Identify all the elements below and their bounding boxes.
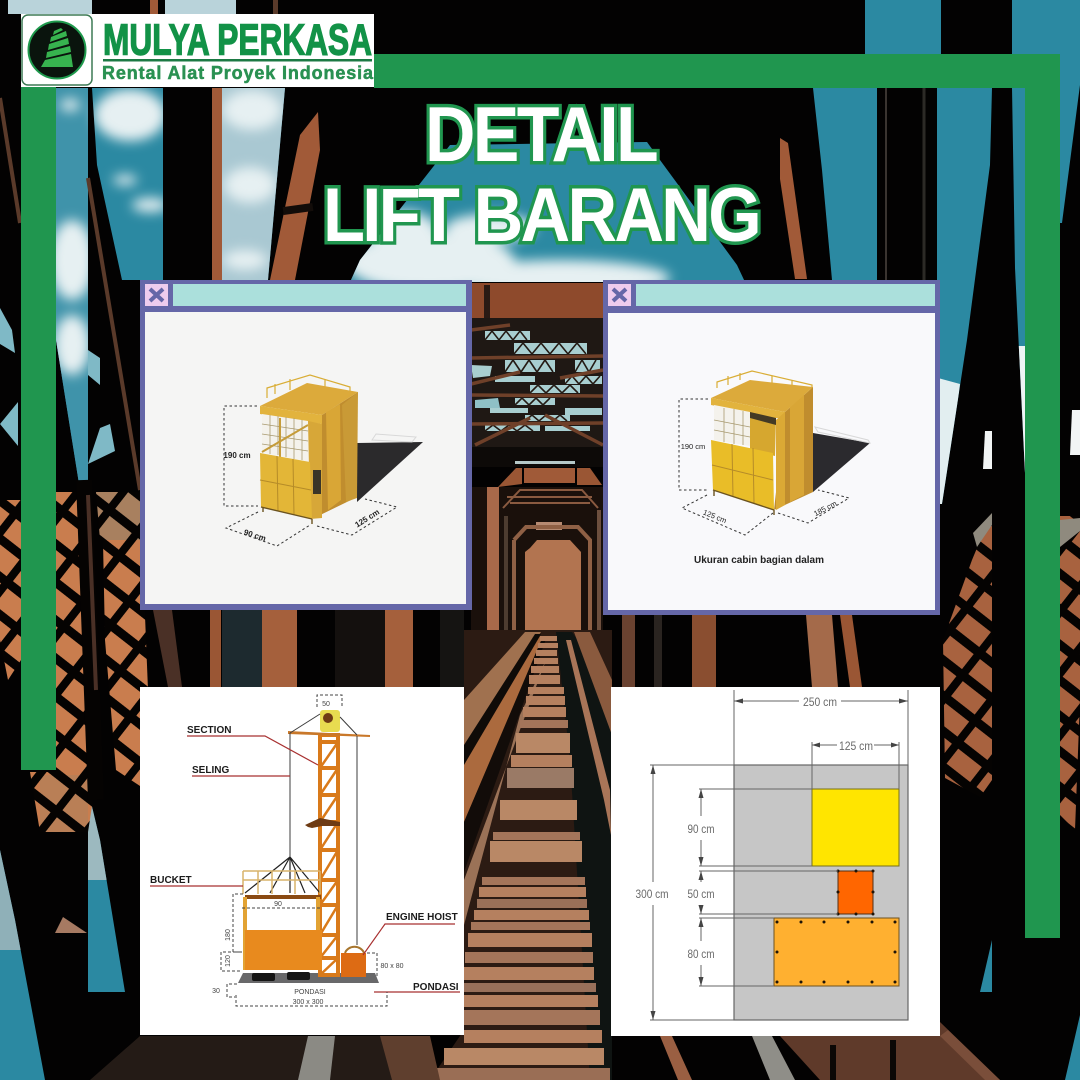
dimension values: 50 (322, 701, 330, 708)
truss sky panes (471, 331, 602, 431)
trolley arm (305, 818, 340, 828)
dimension labels: 125 cm (702, 508, 728, 525)
tagline: Rental Alat Proyek Indonesia (102, 63, 374, 83)
cables (245, 714, 357, 945)
dimension values: 120 (225, 955, 232, 967)
title: Detail Lift Barang: DETAIL (425, 90, 657, 178)
dimension labels (681, 442, 838, 525)
title: Detail Lift Barang (323, 90, 759, 258)
panel: cabin inner dimensions window (603, 280, 940, 615)
logo: Mulya Perkasa (21, 14, 374, 87)
bucket cage (243, 871, 322, 981)
dimension lines (224, 406, 397, 546)
green L-shaped frame (21, 54, 1060, 938)
engine hoist box (341, 947, 366, 977)
rust columns in the upper band (150, 0, 807, 280)
dimension values: 30 (212, 988, 220, 995)
dimension labels (223, 451, 381, 543)
rust lattice on the left tower (0, 492, 148, 933)
icon: close box (608, 284, 631, 306)
caption: Ukuran cabin bagian dalam (694, 555, 824, 566)
dimension lines (650, 690, 908, 1020)
callout labels: SECTION (187, 725, 231, 736)
callout lines (150, 736, 460, 992)
dimension labels: 190 cm (223, 451, 251, 460)
concrete slab (734, 765, 908, 1020)
dimension lines (679, 399, 849, 535)
company name: MULYA PERKASA (103, 16, 372, 64)
foundation base (238, 973, 379, 983)
dimension values: 300 x 300 (293, 999, 323, 1006)
dimension labels: 185 cm (812, 499, 838, 518)
panel: foundation plan diagram (611, 687, 940, 1036)
amber block (774, 918, 899, 986)
dimension values: 50 cm (688, 887, 714, 901)
tower lattice (320, 735, 338, 975)
callout labels (150, 725, 459, 993)
lower ground, rails and rust planks along the bottom edge (90, 1022, 1000, 1080)
shadow on the floor (813, 433, 870, 492)
callout labels: ENGINE HOIST (386, 912, 458, 923)
callout labels: BUCKET (150, 875, 192, 886)
dashed dimensions (221, 695, 387, 1006)
dimension arrows (650, 698, 908, 1020)
boom and head block (288, 710, 370, 737)
columns in the band between the window panels and lower photos (153, 610, 862, 687)
dimension labels: 190 cm (681, 442, 705, 451)
callout labels: SELING (192, 765, 229, 776)
dimension values: 125 cm (839, 739, 873, 753)
central tunnel of rusty bridge portals (471, 283, 603, 632)
dimension values: 80 x 80 (381, 963, 404, 970)
lattice sky panes (0, 308, 1080, 469)
dimension values: 250 cm (803, 695, 837, 709)
dimension values (636, 695, 873, 961)
lift cabin illustration (711, 371, 813, 515)
dimension values: 90 cm (688, 822, 714, 836)
truss zigzags (485, 331, 600, 431)
dimension values: 300 cm (636, 887, 668, 901)
panel: hoist tower side diagram (140, 687, 464, 1035)
dimension values (212, 701, 404, 1006)
title: Detail Lift Barang: LIFT BARANG (323, 173, 759, 258)
truss beams (471, 325, 603, 445)
icon: close box (145, 284, 168, 306)
dark main girders in front of the lattice (0, 88, 924, 800)
lift cabin illustration (260, 375, 358, 524)
dimension values: PONDASI (294, 989, 326, 996)
dimension values: 180 (225, 929, 232, 941)
inner truss band (503, 490, 598, 508)
panel: cabin outer dimensions window (140, 280, 472, 610)
yellow block (812, 789, 899, 866)
dimension labels: 90 cm (243, 528, 267, 543)
dimension labels: 125 cm (353, 507, 381, 529)
dimension values: 90 (274, 901, 282, 908)
icon: building in a circle (28, 22, 86, 78)
orange block (836, 870, 874, 916)
dimension values: 80 cm (688, 947, 714, 961)
wooden sleepers (432, 636, 610, 1080)
railway tracks running to the vanishing point (430, 630, 612, 1080)
shadow on the floor (357, 442, 423, 502)
callout labels: PONDASI (413, 982, 459, 993)
rust lattice on the right tower (943, 512, 1080, 830)
